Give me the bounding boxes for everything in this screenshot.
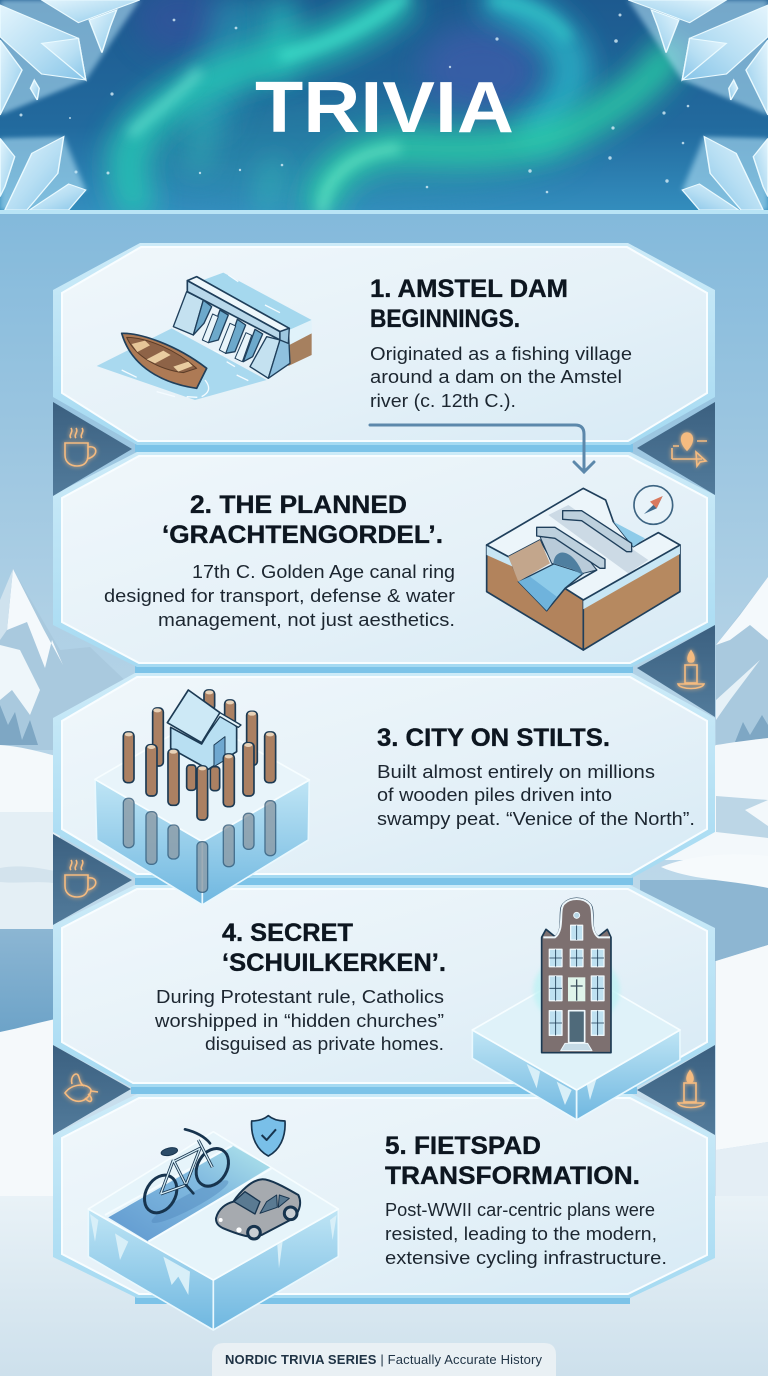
triangle: right candle 2: [637, 1045, 715, 1135]
footer text: NORDIC TRIVIA SERIES | Factually Accurate History: [225, 1352, 542, 1367]
body 2: management, not just aesthetics.: [158, 609, 455, 630]
heading 4: 4. SECRET: [222, 919, 353, 947]
body 1: river (c. 12th C.).: [370, 390, 516, 411]
arrow: panel 1 to panel 2: [370, 425, 594, 472]
body 3: [377, 761, 695, 829]
illustration: canal and bridge: [487, 486, 680, 650]
body 3: swampy peat. “Venice of the North”.: [377, 808, 695, 829]
body 5: [385, 1199, 667, 1268]
body 2: [104, 561, 455, 630]
body 5: resisted, leading to the modern,: [385, 1223, 657, 1244]
icon: shield: [252, 1116, 285, 1156]
body 1: Originated as a fishing village: [370, 343, 632, 364]
triangle: left stroopwafel: [53, 1045, 131, 1135]
icon: compass: [634, 486, 673, 524]
body 4: disguised as private homes.: [205, 1033, 444, 1054]
body 5: extensive cycling infrastructure.: [385, 1247, 667, 1268]
panel: 5 Fietspad: [53, 1094, 715, 1298]
panel: 1 Amstel Dam: [53, 243, 715, 445]
body 5: Post-WWII car-centric plans were: [385, 1199, 655, 1220]
footer pill: [212, 1343, 556, 1376]
heading 5 line 2: TRANSFORMATION.: [385, 1162, 640, 1190]
ice crystals top left: [0, 0, 140, 210]
stars: [20, 14, 689, 193]
body 4: During Protestant rule, Catholics: [156, 986, 444, 1007]
body 3: of wooden piles driven into: [377, 784, 612, 805]
body 3: Built almost entirely on millions: [377, 761, 655, 782]
heading 3: 3. CITY ON STILTS.: [377, 724, 610, 752]
body 4: worshipped in “hidden churches”: [154, 1010, 444, 1031]
triangle: right candle 1: [637, 625, 715, 717]
heading 1: 1. AMSTEL DAM: [370, 275, 568, 303]
heading 5: 5. FIETSPAD: [385, 1132, 541, 1160]
title: TRIVIA: [255, 68, 514, 148]
ice crystals top right: [628, 0, 768, 210]
body 2: designed for transport, defense & water: [104, 585, 455, 606]
triangle: left coffee 2: [53, 834, 132, 925]
illustration: dam and boat: [97, 273, 312, 400]
illustration: house on piles: [95, 690, 309, 905]
heading 2: 2. THE PLANNED: [190, 491, 407, 519]
triangle: left coffee 1: [53, 402, 132, 496]
heading 1 line 2: BEGINNINGS.: [370, 305, 520, 333]
illustration: bicycle and car on ice: [88, 1116, 338, 1330]
header aurora banner: [0, 0, 768, 215]
panel: 2 Grachtengordel: [53, 452, 715, 667]
heading 2 line 2: ‘GRACHTENGORDEL’.: [162, 521, 443, 549]
panel: 3 City on stilts: [53, 673, 715, 878]
header divider strip: [0, 210, 768, 214]
body 1: [370, 343, 632, 411]
body 1: around a dam on the Amstel: [370, 366, 622, 387]
body 4: [154, 986, 444, 1054]
panel: 4 Schuilkerken: [53, 885, 715, 1087]
illustration: hidden church on ice: [472, 898, 680, 1120]
connector bars between panels: [131, 444, 637, 1304]
heading 4 line 2: ‘SCHUILKERKEN’.: [222, 949, 446, 977]
body 2: 17th C. Golden Age canal ring: [192, 561, 455, 582]
triangle: right map pin: [637, 402, 715, 495]
